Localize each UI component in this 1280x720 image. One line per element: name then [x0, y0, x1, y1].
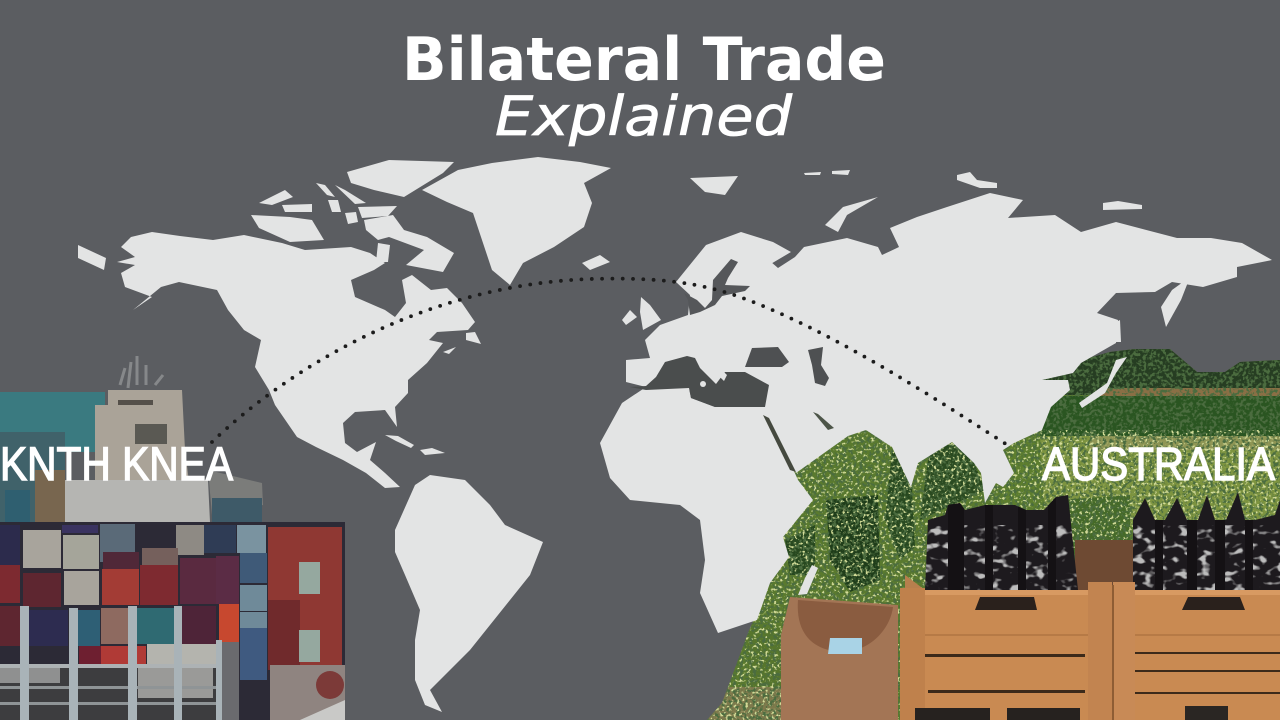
photo: crates of bottles: [900, 490, 1280, 720]
continent: North America: [117, 232, 475, 488]
Arctic island: [335, 185, 366, 204]
Baltic Sea: [684, 259, 750, 315]
Sicily: [700, 381, 706, 387]
Ireland: [622, 310, 637, 325]
Sakhalin: [1115, 320, 1121, 342]
Novaya Zemlya: [825, 197, 878, 232]
title: Bilateral Trade: [402, 25, 886, 95]
Ellesmere Island: [347, 160, 454, 197]
South America: [395, 475, 543, 712]
kraft box with blue item: [781, 597, 898, 720]
Arctic island: [345, 212, 358, 224]
Great Britain: [640, 297, 661, 330]
Black Sea: [745, 347, 789, 367]
carton behind bottles: [1075, 540, 1135, 592]
Franz Josef islands: [804, 172, 821, 175]
Japan: [1079, 357, 1127, 408]
inland seas: [630, 259, 834, 472]
Iceland: [582, 255, 610, 270]
Africa: [600, 387, 813, 633]
Kamchatka: [1161, 277, 1190, 327]
Newfoundland: [466, 332, 481, 344]
bottles: [920, 490, 1280, 592]
Caspian Sea: [808, 347, 829, 386]
Persian Gulf: [813, 412, 834, 430]
Victoria Island: [251, 215, 324, 242]
photo: green fields: [700, 340, 1280, 720]
Franz Josef islands: [832, 170, 850, 175]
Severnaya Zemlya: [957, 172, 997, 188]
label: origin country: KNTH KNEA: [0, 437, 234, 490]
Italy: [694, 350, 727, 381]
world map: [78, 157, 1272, 712]
Mediterranean Sea: [630, 356, 769, 407]
Devon Island: [358, 206, 397, 218]
Arctic island: [328, 200, 341, 212]
Baffin Island: [364, 215, 454, 272]
Svalbard: [690, 176, 738, 195]
New Siberian islands: [1103, 201, 1142, 210]
Eurasia: [626, 193, 1272, 503]
Baja California: [285, 405, 303, 437]
Hispaniola: [420, 448, 445, 455]
Melville Island: [282, 204, 312, 212]
Cuba: [385, 435, 414, 448]
Southampton Island: [376, 243, 390, 262]
Greenland: [422, 157, 611, 285]
Madagascar: [798, 565, 818, 595]
Arctic island: [316, 183, 335, 197]
photo: container ship: [0, 356, 345, 720]
Nova Scotia: [443, 347, 456, 354]
Banks Island: [259, 190, 293, 205]
subtitle: Explained: [495, 85, 793, 148]
Red Sea: [763, 415, 796, 472]
dotted trade route arc: [212, 279, 1012, 448]
wooden crates: [900, 590, 1280, 720]
Aleutian island: [78, 245, 106, 270]
